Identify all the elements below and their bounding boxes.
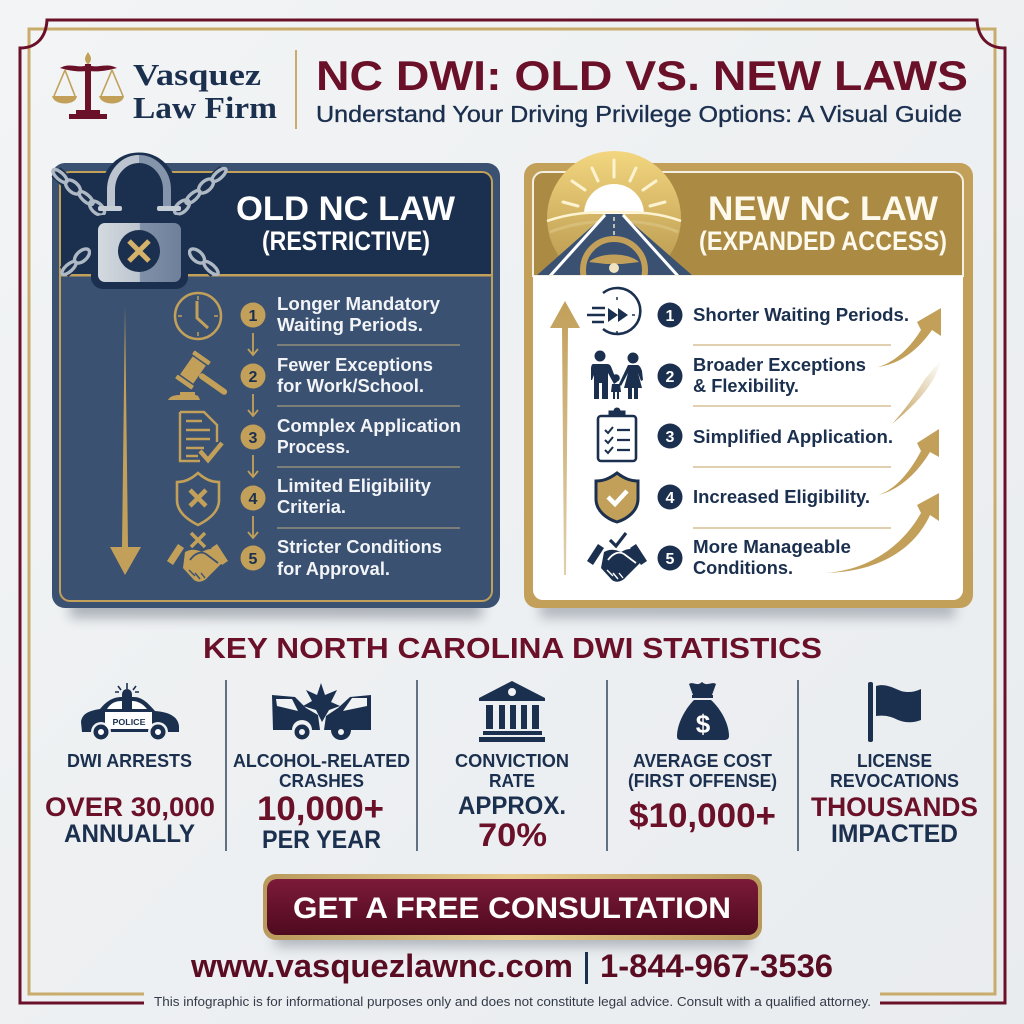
stat text: conviction <box>455 751 569 853</box>
icon: family <box>591 350 643 399</box>
numbered badges: 2 <box>666 369 675 386</box>
old law list text: Longer Mandatory <box>277 293 441 314</box>
stat text: arrests: ANNUALLY <box>64 820 195 848</box>
stat text: cost <box>628 751 777 835</box>
icon: shield with check <box>596 473 638 522</box>
new law list text: Simplified Application. <box>693 426 893 447</box>
numbered badges and step arrows: 5 <box>249 551 258 568</box>
old law list text: Criteria. <box>277 496 346 517</box>
logo wordmark: Vasquez <box>133 57 261 92</box>
stat text: crashes: PER YEAR <box>262 826 381 854</box>
stat: average cost <box>628 682 777 835</box>
icon: gavel <box>168 350 236 407</box>
numbered badges: 1 <box>666 308 675 325</box>
old law list text: Complex Application <box>277 415 461 436</box>
old law list text <box>277 293 461 579</box>
icon: clipboard checklist <box>598 408 636 461</box>
numbered badges and step arrows: 2 <box>249 369 258 386</box>
panel heading: new law: NEW NC LAW <box>708 190 939 228</box>
stat text: revocations: THOUSANDS <box>811 792 978 822</box>
icon: police car: POLICE <box>112 717 146 727</box>
numbered badges and step arrows: 3 <box>249 430 258 447</box>
panel: new NC law <box>524 151 973 618</box>
section heading: statistics: KEY NORTH CAROLINA DWI STATISTICS <box>203 633 822 665</box>
stat text: revocations <box>811 751 978 848</box>
button: free consultation <box>263 874 762 947</box>
panel heading: new law: (EXPANDED ACCESS) <box>699 226 947 256</box>
stat text: arrests <box>45 751 215 848</box>
numbered badges and step arrows: 1 <box>249 308 258 325</box>
stat text: crashes: CRASHES <box>279 771 364 791</box>
stat text: conviction: APPROX. <box>458 792 566 820</box>
icon: car crash <box>272 683 371 740</box>
subtitle: Understand Your Driving Privilege Options: A Visual Guide <box>316 101 962 127</box>
numbered badges and step arrows: 4 <box>249 491 258 508</box>
stat text: crashes <box>233 751 410 854</box>
panel heading: old law <box>236 190 456 256</box>
new law list text: Broader Exceptions <box>693 354 866 375</box>
panel heading: old law: OLD NC LAW <box>236 190 456 228</box>
icon: flag <box>868 682 921 742</box>
old law list text: Waiting Periods. <box>277 314 423 335</box>
icon: money bag: $ <box>696 709 711 739</box>
contact line <box>190 948 833 984</box>
button: free consultation: GET A FREE CONSULTATION <box>293 892 731 925</box>
new law list text: & Flexibility. <box>693 375 799 396</box>
new law list text: Shorter Waiting Periods. <box>693 304 909 325</box>
icon: scales of justice <box>52 52 124 119</box>
stat text: conviction: 70% <box>478 817 547 853</box>
numbered badges: 5 <box>666 551 675 568</box>
panel heading: new law <box>699 190 947 256</box>
contact line: 1-844-967-3536 <box>600 948 833 984</box>
panel: old NC law <box>51 156 500 618</box>
stat: conviction rate <box>455 681 569 853</box>
old law list text: for Approval. <box>277 558 390 579</box>
icon: padlock with chains <box>51 156 228 289</box>
stat text: revocations: REVOCATIONS <box>830 771 959 791</box>
icon: money bag <box>677 682 729 740</box>
stat text: cost: $10,000+ <box>629 797 776 835</box>
stat text: conviction: CONVICTION <box>455 751 569 771</box>
stat text: cost: AVERAGE COST <box>633 751 772 771</box>
stat: license revocations <box>811 682 978 848</box>
numbered badges <box>658 302 682 570</box>
numbered badges and step arrows <box>240 302 266 570</box>
arrow: long downward <box>110 305 141 575</box>
new law list text: Increased Eligibility. <box>693 486 870 507</box>
numbered badges: 4 <box>666 490 675 507</box>
stat text: arrests: OVER 30,000 <box>45 792 215 822</box>
stat text: crashes: ALCOHOL-RELATED <box>233 751 410 771</box>
icon: document with check <box>180 412 222 461</box>
numbered badges: 3 <box>666 429 675 446</box>
icon: fast-forward clock <box>587 288 640 334</box>
stat text: arrests: DWI ARRESTS <box>67 751 192 771</box>
old law list text: Fewer Exceptions <box>277 354 433 375</box>
stat text: cost: (FIRST OFFENSE) <box>628 771 777 791</box>
old law list text: for Work/School. <box>277 375 424 396</box>
panel heading: old law: (RESTRICTIVE) <box>262 226 430 256</box>
icon: handshake with check <box>587 533 647 582</box>
arrows: rising curved <box>825 308 941 573</box>
disclaimer: This infographic is for informational purposes only and does not constitute legal advice. Consult with a qualified attorney. <box>154 994 871 1009</box>
logo wordmark: Law Firm <box>133 90 277 125</box>
old law list text: Limited Eligibility <box>277 475 432 496</box>
header: logo <box>52 50 297 129</box>
icon: police car <box>81 683 179 740</box>
icon: courthouse <box>479 681 545 742</box>
stat: alcohol-related crashes <box>233 683 410 854</box>
new law list text: Conditions. <box>693 557 793 578</box>
stat text: revocations: LICENSE <box>857 751 932 771</box>
icon: clock <box>175 293 221 339</box>
stat text: revocations: IMPACTED <box>831 820 958 848</box>
icon: sunrise road with steering wheel <box>537 151 692 275</box>
icon: shield with X <box>177 473 219 525</box>
old law list text: Stricter Conditions <box>277 536 442 557</box>
arrow: long upward <box>550 301 580 575</box>
new law list text <box>693 304 909 578</box>
logo wordmark <box>133 57 277 125</box>
stat text: conviction: RATE <box>489 771 535 791</box>
stat: DWI arrests <box>45 683 215 848</box>
new law list text: More Manageable <box>693 536 851 557</box>
stat text: crashes: 10,000+ <box>257 790 384 828</box>
icon: handshake with X <box>167 533 228 582</box>
title: NC DWI: OLD VS. NEW LAWS <box>316 52 968 99</box>
old law list text: Process. <box>277 436 350 457</box>
contact line: www.vasquezlawnc.com <box>190 948 573 984</box>
